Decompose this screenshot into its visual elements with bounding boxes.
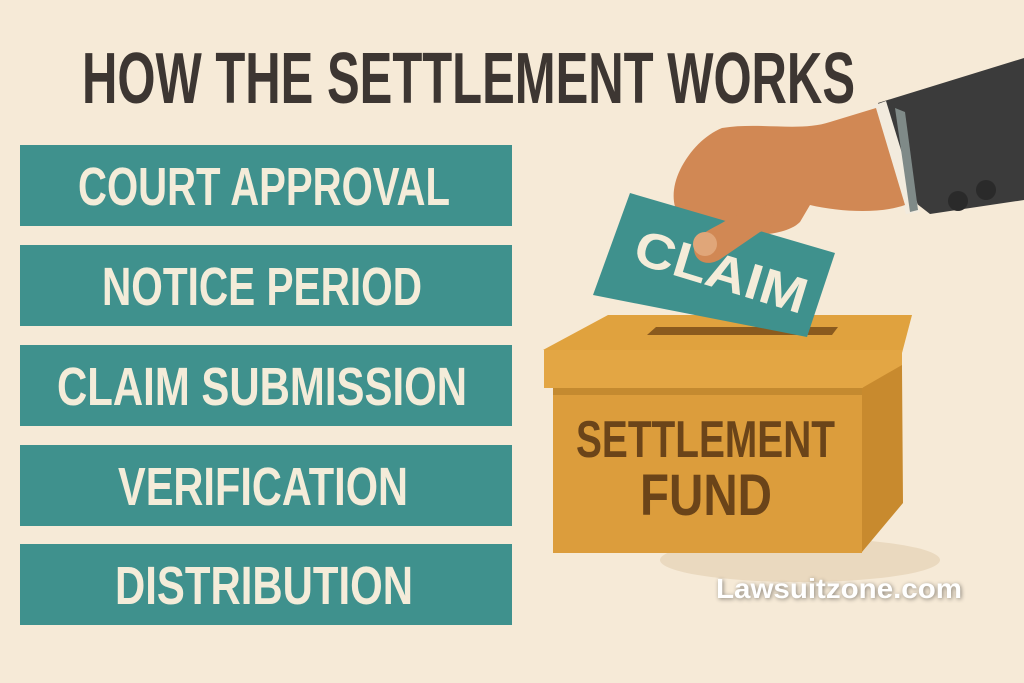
step: distribution xyxy=(20,544,512,625)
claim card: CLAIM xyxy=(628,219,814,325)
watermark: Lawsuitzone.com xyxy=(716,573,962,604)
step: notice period: NOTICE PERIOD xyxy=(102,257,422,317)
box label: FUND xyxy=(640,463,772,528)
hand with sleeve xyxy=(674,58,1024,235)
step: court approval xyxy=(20,145,512,226)
step: distribution: DISTRIBUTION xyxy=(115,556,413,616)
step: court approval: COURT APPROVAL xyxy=(78,157,450,217)
thumb xyxy=(693,205,774,263)
step: claim submission xyxy=(20,345,512,426)
step: verification xyxy=(20,445,512,526)
box label xyxy=(576,411,835,528)
claim card xyxy=(593,193,835,337)
steps list xyxy=(20,145,512,625)
step: claim submission: CLAIM SUBMISSION xyxy=(57,357,467,417)
box shadow xyxy=(660,538,940,582)
box label: SETTLEMENT xyxy=(576,411,835,469)
step: notice period xyxy=(20,245,512,326)
step: verification: VERIFICATION xyxy=(118,457,408,517)
ballot box xyxy=(543,315,912,553)
